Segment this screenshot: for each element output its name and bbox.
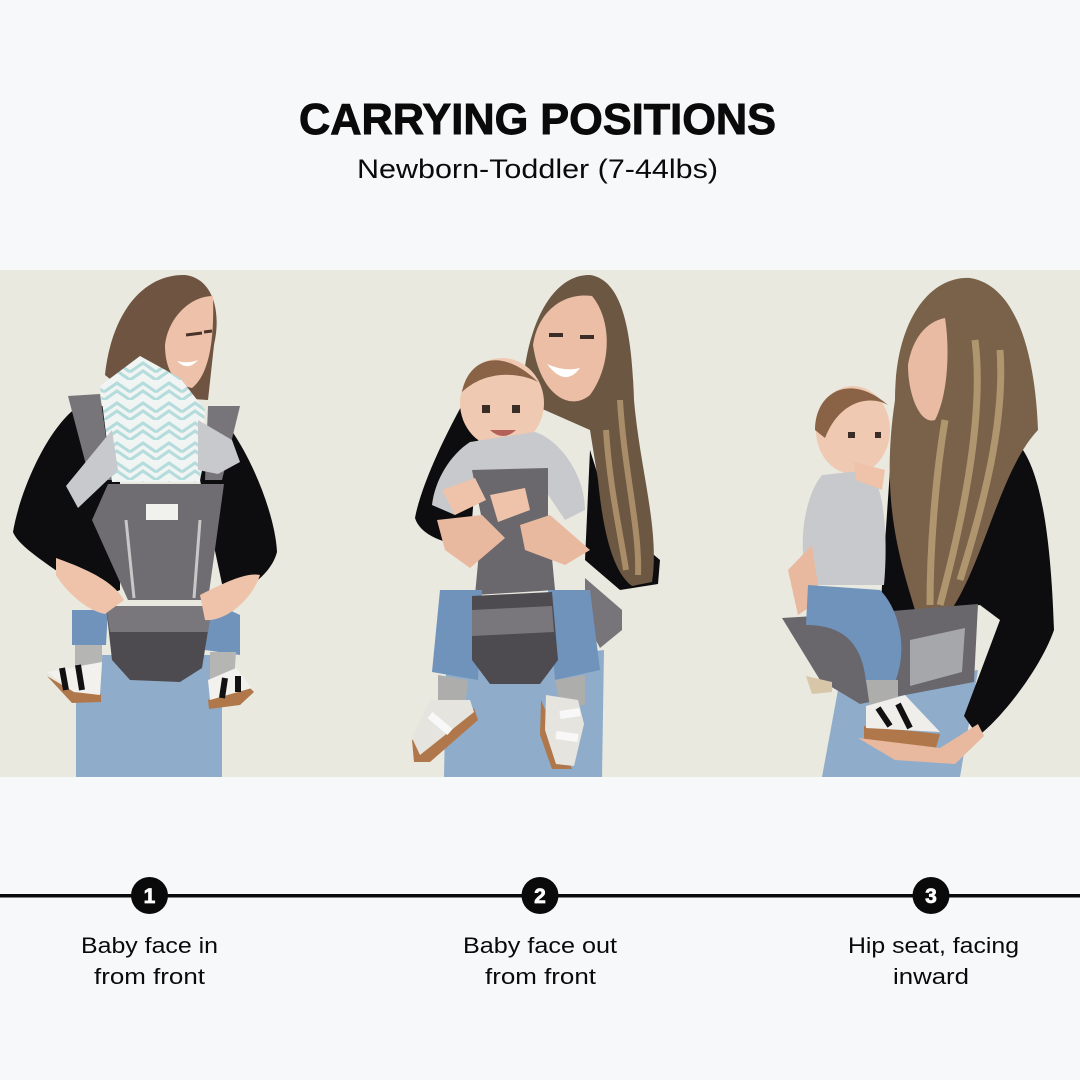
figure 3: hip seat facing inward — [782, 278, 1054, 777]
baby head — [816, 386, 890, 474]
jeans — [444, 650, 604, 777]
mother eyes — [549, 335, 594, 337]
shoe stripes — [62, 665, 238, 698]
carrier panel — [472, 468, 555, 595]
highlight strands — [606, 400, 638, 575]
arms black — [415, 405, 480, 545]
step 3 marker — [912, 877, 950, 914]
step 1 marker — [131, 877, 168, 914]
step 2 marker: 2 — [534, 885, 546, 908]
figure 1: baby face in from front — [13, 275, 277, 777]
shoulder straps — [68, 394, 112, 480]
timeline — [0, 877, 1080, 914]
eye — [186, 331, 212, 335]
hip belt pouch — [106, 606, 212, 682]
long hair — [890, 278, 1038, 612]
jeans — [76, 655, 222, 777]
step 1 marker: 1 — [144, 885, 156, 908]
smile — [547, 364, 580, 377]
hip seat belt — [782, 604, 978, 704]
black sleeve and torso — [880, 432, 1054, 736]
hair — [105, 275, 217, 400]
step 3 caption: inward — [893, 964, 969, 989]
step 2 caption — [463, 933, 617, 989]
step 3 caption — [848, 933, 1019, 989]
hair highlights — [930, 340, 1001, 605]
mother face — [533, 295, 607, 401]
mother hand under shoe — [858, 724, 984, 764]
step 1 caption: from front — [94, 964, 205, 989]
photo band background — [0, 270, 1080, 777]
subtitle: Newborn-Toddler (7-44lbs) — [357, 154, 718, 184]
step 2 caption: from front — [485, 964, 596, 989]
carrier panel — [92, 484, 224, 600]
baby legs — [72, 600, 240, 655]
shoes — [412, 695, 584, 766]
long hair — [522, 275, 654, 586]
arms black — [13, 402, 120, 600]
shoe stripes — [878, 704, 910, 728]
baby leg — [806, 585, 901, 682]
baby arms — [66, 430, 118, 508]
baby head — [460, 358, 544, 448]
baby back chevron hood — [100, 356, 205, 482]
baby legs — [432, 590, 600, 680]
baby torso and arms — [432, 432, 585, 520]
mother hands — [437, 515, 590, 568]
face — [165, 296, 213, 388]
back shoe — [806, 676, 832, 694]
mother supporting hand — [788, 545, 820, 615]
figure 2: baby face out from front — [412, 275, 660, 777]
socks — [75, 645, 236, 682]
belt band — [472, 606, 554, 636]
front shoe sole — [864, 726, 940, 748]
carrier seams — [126, 520, 200, 598]
baby eyes — [848, 432, 881, 438]
shoe soles — [47, 676, 254, 709]
shoe soles — [412, 700, 572, 769]
carrier label — [146, 504, 178, 520]
step 2 marker — [522, 877, 558, 914]
mother face — [908, 318, 948, 421]
baby eyes and mouth — [482, 405, 520, 413]
timeline line — [0, 894, 1080, 898]
baby hair — [462, 360, 538, 392]
belt band — [106, 606, 212, 632]
sock — [866, 680, 898, 708]
shoes — [47, 662, 252, 700]
mesh pocket — [910, 628, 965, 686]
front shoe — [866, 695, 940, 732]
jeans — [822, 670, 978, 777]
step 2 caption: Baby face out — [463, 933, 617, 958]
side mesh pocket — [585, 578, 622, 648]
shoe straps — [430, 712, 580, 738]
baby hands — [442, 478, 530, 522]
step 3 caption: Hip seat, facing — [848, 933, 1019, 958]
hands — [56, 558, 260, 620]
hip belt pouch — [472, 592, 558, 684]
title: CARRYING POSITIONS — [299, 95, 776, 144]
baby hand at mouth — [854, 462, 885, 490]
step 3 marker: 3 — [925, 885, 937, 908]
step 1 caption: Baby face in — [81, 933, 218, 958]
step 1 caption — [81, 933, 218, 989]
baby hair — [815, 388, 888, 438]
baby torso — [803, 470, 886, 585]
socks — [438, 675, 585, 708]
baby mouth — [490, 430, 516, 436]
smile — [177, 360, 198, 366]
